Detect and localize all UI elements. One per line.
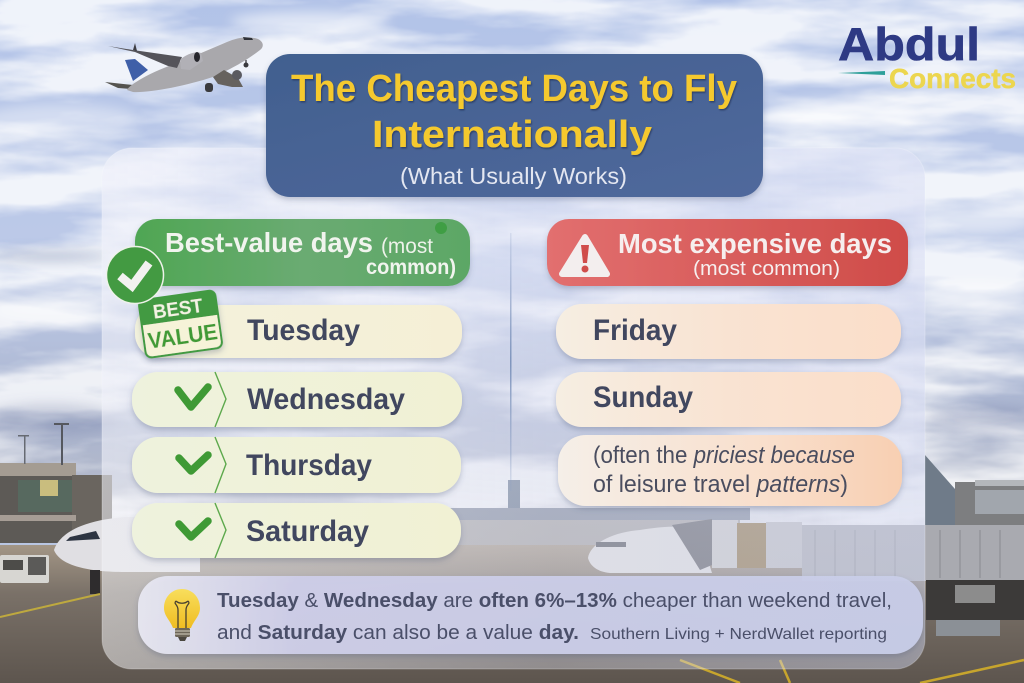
row: Friday	[556, 304, 901, 359]
row: Wednesday: Wednesday	[247, 383, 405, 416]
logo: Abdul Connects: Connects	[889, 63, 1016, 94]
heading: most expensive days	[547, 219, 908, 286]
heading: best-value days: Best-value days	[165, 227, 373, 258]
note: priciest explanation: of leisure travel patterns)	[593, 471, 848, 498]
apron markings	[0, 594, 100, 617]
badge: best value	[138, 290, 223, 358]
tip line 2: and Saturday can also be a value day.	[217, 622, 579, 644]
icon: light bulb	[164, 589, 200, 641]
row: Tuesday: Tuesday	[247, 314, 360, 347]
panel: best-value days	[106, 219, 470, 558]
row: Friday: Friday	[593, 314, 677, 347]
heading: most expensive days: Most expensive days	[618, 228, 892, 259]
title line 1: The Cheapest Days to Fly	[291, 68, 737, 110]
left terminal	[0, 463, 76, 543]
heading: best-value days: common)	[366, 256, 456, 279]
tip line 1: Tuesday & Wednesday are often 6%–13% cheaper than weekend travel,	[217, 590, 892, 612]
title line 2: Internationally	[372, 114, 652, 156]
icon: warning triangle	[562, 237, 607, 274]
note: priciest explanation: (often the priciest because	[593, 442, 855, 469]
logo: Abdul Connects: Abdul	[838, 18, 980, 70]
badge: best value: BEST	[152, 296, 205, 324]
row: Thursday: Thursday	[246, 449, 372, 482]
row: Saturday: Saturday	[246, 515, 369, 548]
distant apron buildings	[450, 508, 750, 520]
airplane illustration	[105, 37, 263, 92]
ground vehicle	[0, 555, 49, 583]
callout: tip	[138, 576, 923, 654]
badge: best value: VALUE	[146, 319, 219, 354]
note: priciest explanation	[558, 435, 902, 506]
icon: check circle	[106, 246, 164, 304]
subtitle: (What Usually Works)	[400, 163, 627, 189]
heading: most expensive days: (most common)	[693, 258, 840, 280]
heading: best-value days: (most	[381, 235, 433, 258]
row: Sunday: Sunday	[593, 381, 693, 414]
main translucent panel	[102, 148, 925, 669]
heading: best-value days	[135, 219, 470, 286]
left aircraft	[54, 517, 200, 572]
row: Thursday	[132, 437, 461, 493]
row: Tuesday	[135, 305, 462, 358]
right roof and building	[925, 455, 992, 531]
jet bridge	[672, 519, 712, 570]
panel: most expensive days	[547, 219, 908, 506]
row: Wednesday	[132, 372, 462, 427]
logo: Abdul Connects	[838, 18, 1016, 94]
column divider	[510, 233, 512, 491]
right aircraft	[588, 527, 712, 573]
row: Saturday	[132, 503, 461, 558]
source credit: Southern Living + NerdWallet reporting	[590, 626, 887, 643]
title banner	[266, 54, 763, 197]
row: Sunday	[556, 372, 901, 427]
